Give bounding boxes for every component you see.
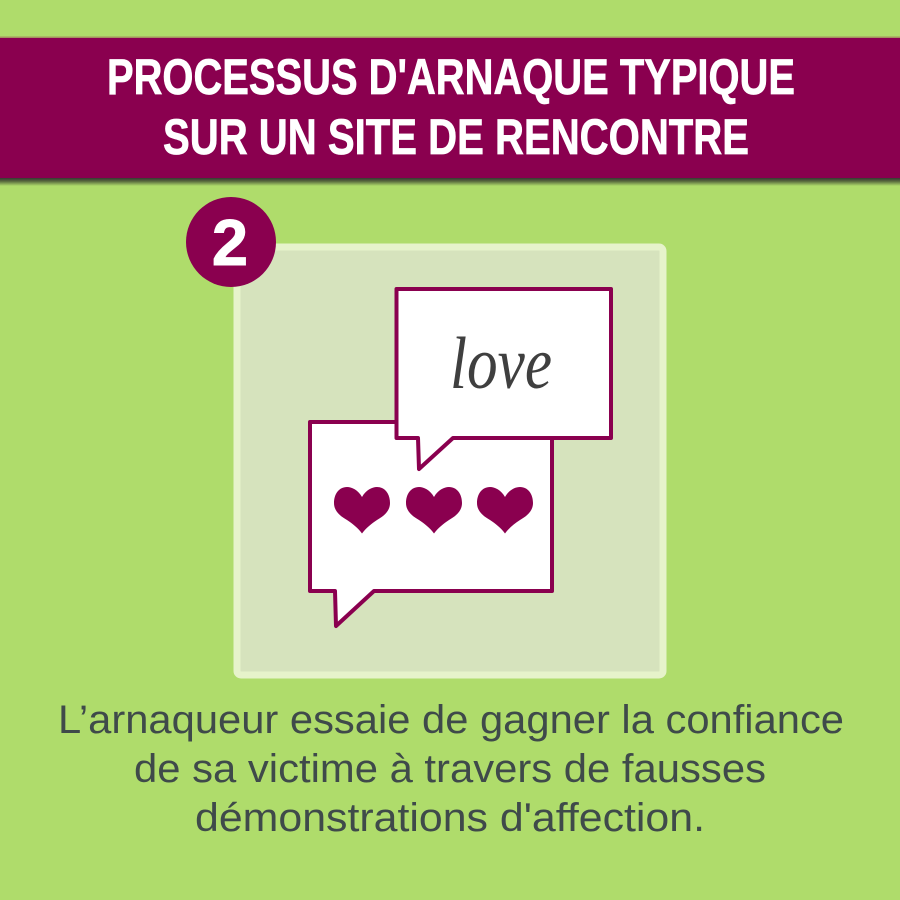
title: SUR UN SITE DE RENCONTRE [163, 109, 749, 165]
title [107, 49, 795, 165]
icon: three hearts [334, 487, 533, 534]
speech bubble: hearts [310, 422, 552, 626]
description text [58, 698, 844, 840]
speech bubble: love [396, 289, 611, 469]
handwritten word: love: love [450, 323, 552, 405]
title banner [0, 36, 900, 186]
step number badge: 2 [212, 206, 248, 279]
description text: de sa victime à travers de fausses [134, 747, 766, 791]
description text: L’arnaqueur essaie de gagner la confiance [58, 698, 844, 742]
illustration panel [237, 247, 663, 675]
description text: démonstrations d'affection. [195, 796, 705, 840]
step number badge [186, 197, 276, 287]
